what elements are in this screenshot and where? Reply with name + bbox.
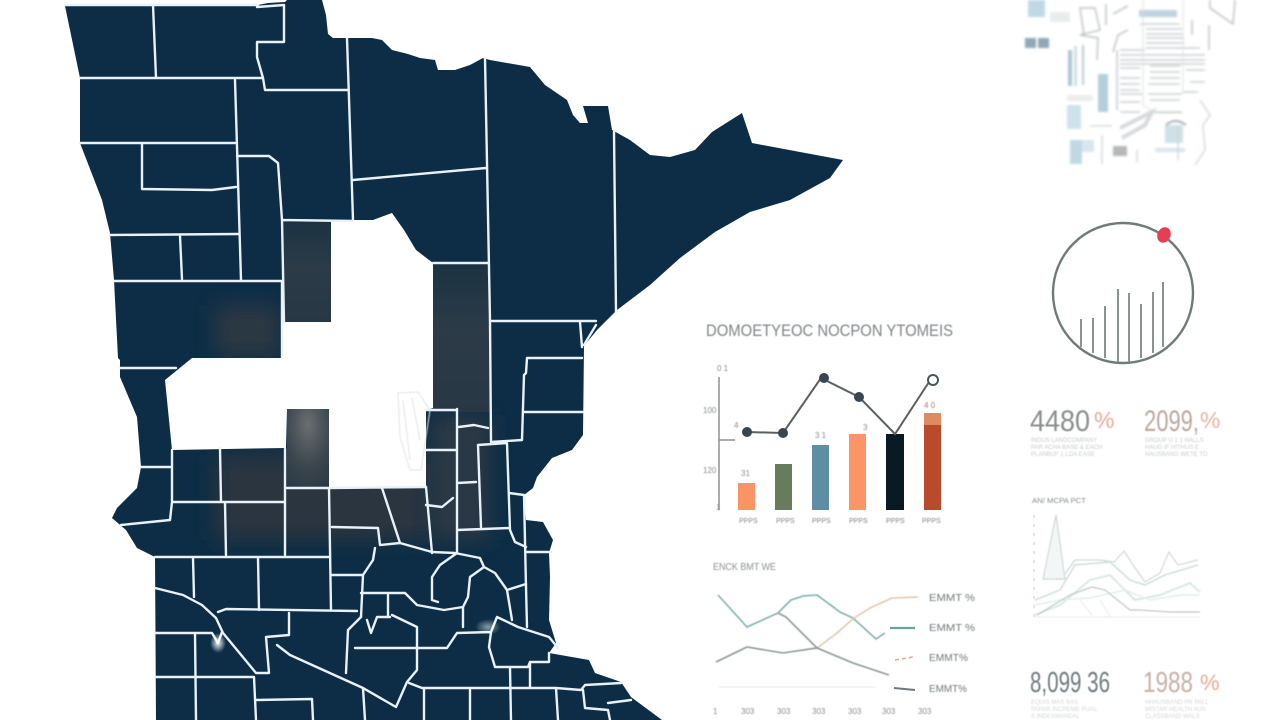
bars <box>738 413 941 510</box>
stat: 1988 percent: % <box>1200 670 1220 695</box>
bar category labels: PPPS <box>886 518 905 525</box>
map silhouette <box>65 0 843 720</box>
lit county block <box>287 409 329 487</box>
bar value labels: 31 <box>741 469 750 478</box>
stat: 8,099 36: 8,099 36 <box>1030 667 1110 699</box>
bar value labels: 4 0 <box>924 401 936 410</box>
axis labels: 100 <box>703 406 717 415</box>
stat: 1988 percent: CLASSBAND WALS <box>1145 714 1200 720</box>
axis labels: 0 1 <box>717 364 729 373</box>
map: Minnesota counties <box>65 0 843 720</box>
schematic swatches <box>1025 0 1185 164</box>
stat: 2099 percent: % <box>1200 407 1220 433</box>
shaded county strip north <box>283 222 331 322</box>
trend line with markers <box>742 373 938 438</box>
line chart title: ENCK BMT WE <box>713 562 776 573</box>
red marker <box>1155 225 1173 245</box>
bar category labels: PPPS <box>739 518 758 525</box>
peach line <box>817 597 918 648</box>
county boundaries <box>65 5 631 720</box>
y axis <box>719 377 735 510</box>
x axis labels: 303 <box>848 707 862 716</box>
bar value labels <box>734 401 936 478</box>
shaded county strip east <box>433 264 490 412</box>
area chart x ticks <box>1037 622 1200 626</box>
bar category labels <box>739 518 941 525</box>
bar category labels: PPPS <box>922 518 941 525</box>
chart title: DOMOETYEOC NOCPON YTOMEIS <box>706 321 953 340</box>
axis labels: 120 <box>703 466 717 475</box>
small area chart <box>1032 496 1200 624</box>
stat: 4480 percent: 4480 <box>1030 405 1090 438</box>
legend: EMMT% <box>929 684 967 695</box>
axis labels: 1 <box>716 503 721 512</box>
stat: 8,099 36: PAPAR INCREME PUAL <box>1031 707 1098 713</box>
bar category labels: PPPS <box>776 518 795 525</box>
x axis labels: 303 <box>777 707 791 716</box>
bar value labels: 3 <box>863 423 868 432</box>
schematic rows of lines <box>1080 0 1235 165</box>
stat: 1988 percent <box>1143 667 1220 720</box>
stat: 2099 percent: HAUG IF HITHUS E <box>1145 445 1199 451</box>
bar and line chart panel <box>703 321 953 525</box>
x axis labels: 303 <box>882 707 896 716</box>
x axis labels: 303 <box>741 707 755 716</box>
bar category labels: PPPS <box>812 518 831 525</box>
x axis labels <box>713 707 932 716</box>
gauge bars <box>1081 282 1163 362</box>
stat: 1988 percent: 1988 <box>1143 667 1193 699</box>
top right blurred schematic artwork <box>1025 0 1235 165</box>
baseline <box>719 686 876 688</box>
stat: 4480 percent: PAR ACHA BASE & EACH <box>1031 445 1102 451</box>
x axis labels: 303 <box>812 707 826 716</box>
legend <box>890 593 975 695</box>
area chart left ticks <box>1033 515 1035 620</box>
circular gauge <box>1053 223 1193 363</box>
bar value labels: 3 1 <box>815 431 827 440</box>
stat: 1988 percent: HHAUSBAND PR PALL <box>1145 700 1209 706</box>
stat: 4480 percent: INDUS LANDCOMPANY <box>1031 438 1097 444</box>
glow south <box>475 619 501 635</box>
stat: 2099 percent: 2099, <box>1144 405 1199 438</box>
legend: EMMT% <box>929 653 968 664</box>
stat: 2099 percent: GROUP U 1 1 HALLS <box>1145 438 1204 444</box>
glow west <box>210 633 226 653</box>
bar value labels: 4 <box>734 421 739 430</box>
multi line chart panel <box>713 562 975 716</box>
stat: 4480 percent: % <box>1094 407 1114 433</box>
area chart title: AN/ MCPA PCT <box>1032 496 1086 505</box>
area chart lines <box>1035 515 1200 617</box>
stat: 8,099 36 <box>1030 667 1110 720</box>
gauge ring <box>1053 223 1193 363</box>
stat: 8,099 36: EQUIS MAS BAS <box>1031 700 1078 706</box>
grey connector line <box>778 613 817 648</box>
stat: 2099 percent <box>1144 405 1220 458</box>
x axis labels: 303 <box>918 707 932 716</box>
faint sketch mark <box>398 392 430 470</box>
legend: EMMT % <box>929 623 975 634</box>
stat: 8,099 36: S INDEXMANDAL <box>1031 714 1081 720</box>
legend: EMMT % <box>929 593 975 604</box>
stat: 1988 percent: MISTAR HEALTH AUS <box>1145 707 1206 713</box>
bar category labels: PPPS <box>849 518 868 525</box>
grey line <box>716 647 889 675</box>
stat: 2099 percent: HAUSBANG WETE TO <box>1145 452 1208 458</box>
stat: 4480 percent: PLANBUF 1 LOA EASE <box>1031 452 1095 458</box>
soft shading across central counties <box>215 305 490 540</box>
stat: 4480 percent <box>1030 405 1114 458</box>
x axis labels: 1 <box>713 707 718 716</box>
teal line <box>718 595 885 639</box>
axis labels <box>703 364 729 512</box>
